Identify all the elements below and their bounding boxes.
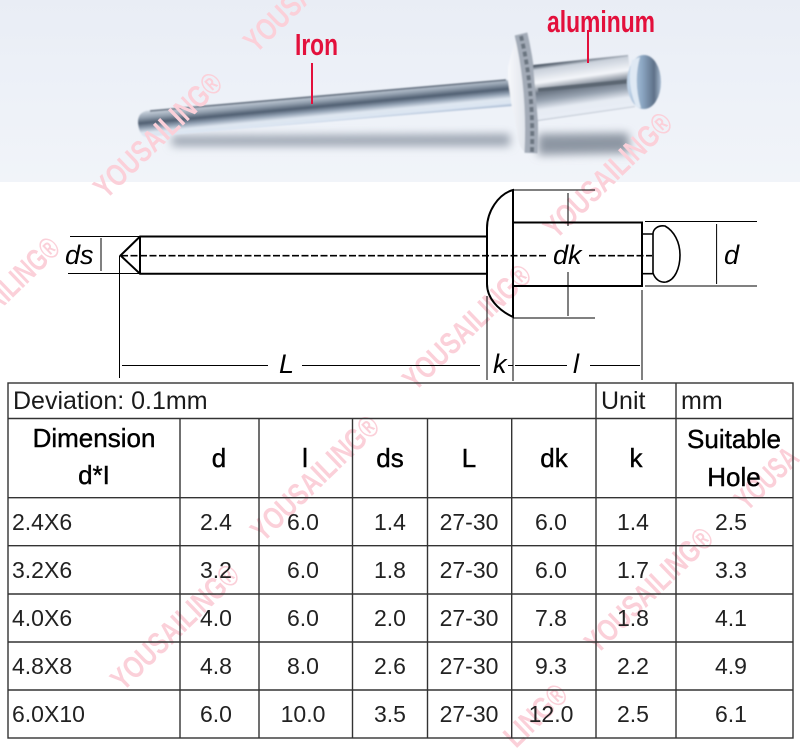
row 3.2X6: 3.2X6 — [12, 557, 72, 583]
row 6.0X10: 2.5 — [617, 701, 649, 727]
row 4.8X8 — [12, 653, 747, 679]
row 6.0X10: 27-30 — [440, 701, 498, 727]
row 4.0X6: 4.0X6 — [12, 605, 72, 631]
row 2.4X6: 1.4 — [617, 509, 649, 535]
dimension lines — [68, 190, 757, 381]
rivet flange head — [487, 190, 513, 317]
row 6.0X10: 6.1 — [715, 701, 747, 727]
watermarks: YOUSAILING® — [578, 520, 721, 660]
row 3.2X6: 6.0 — [287, 557, 319, 583]
row 4.0X6: 4.0 — [200, 605, 232, 631]
row 4.0X6: 6.0 — [287, 605, 319, 631]
row 4.8X8: 4.9 — [715, 653, 747, 679]
row 4.0X6: 1.8 — [617, 605, 649, 631]
table header row: d — [212, 443, 226, 473]
table header row: k — [630, 443, 644, 473]
watermarks: YOUSAILING® — [87, 65, 230, 205]
table header row: l — [302, 443, 308, 473]
row 4.0X6: 4.1 — [715, 605, 747, 631]
table data rows — [12, 509, 747, 727]
row 4.8X8: 27-30 — [440, 653, 498, 679]
label: aluminum: aluminum — [547, 4, 655, 39]
table header row: dk — [540, 443, 569, 473]
row 4.0X6 — [12, 605, 747, 631]
watermarks: YOUSAILING® — [244, 408, 387, 548]
table header row: L — [462, 443, 476, 473]
row 3.2X6 — [12, 557, 747, 583]
label: Iron: Iron — [295, 27, 338, 62]
row 3.2X6: 1.8 — [374, 557, 406, 583]
row 2.4X6: 2.4X6 — [12, 509, 72, 535]
panel: product photo — [0, 0, 800, 182]
diagram dimension labels: dk — [553, 240, 583, 270]
rivet body — [513, 222, 642, 286]
row 2.4X6: 6.0 — [535, 509, 567, 535]
label: Iron — [295, 27, 338, 104]
row 4.0X6: 7.8 — [535, 605, 567, 631]
row 3.2X6: 3.3 — [715, 557, 747, 583]
table header row: ds — [376, 443, 404, 473]
watermarks: YOUSAILING® — [537, 105, 680, 245]
row 2.4X6 — [12, 509, 747, 535]
icon: rivet photograph — [138, 34, 661, 153]
row 4.8X8: 4.8 — [200, 653, 232, 679]
watermarks: YOUSAILING® — [396, 257, 539, 397]
row 2.4X6: 27-30 — [440, 509, 498, 535]
table grid — [8, 383, 793, 738]
diagram dimension labels: l — [573, 349, 580, 379]
table header row: Suitable — [687, 424, 781, 454]
centre line — [121, 255, 652, 257]
row 6.0X10: 6.0X10 — [12, 701, 85, 727]
row 6.0X10: 10.0 — [281, 701, 325, 727]
rivet shadow — [172, 133, 630, 155]
technical diagram — [68, 190, 757, 381]
row 6.0X10: 6.0 — [200, 701, 232, 727]
watermarks: YOUSAILING® — [104, 557, 247, 697]
shaft outline — [120, 236, 487, 274]
row 3.2X6: 1.7 — [617, 557, 649, 583]
row 4.8X8: 4.8X8 — [12, 653, 72, 679]
diagram dimension labels: k — [493, 349, 508, 379]
row 4.0X6: 2.0 — [374, 605, 406, 631]
diagram dimension labels: d — [724, 240, 740, 270]
table header row: Dimension — [33, 423, 155, 453]
row 3.2X6: 27-30 — [440, 557, 498, 583]
mandrel head — [642, 226, 680, 282]
table header row: d*I — [78, 460, 110, 490]
table header row: Hole — [707, 462, 761, 492]
table top row: mm — [681, 387, 723, 415]
row 4.8X8: 9.3 — [535, 653, 567, 679]
table header row — [33, 423, 781, 492]
specification table — [8, 383, 793, 738]
label: aluminum — [547, 4, 655, 63]
table top row — [13, 387, 723, 415]
diagram dimension labels — [65, 240, 740, 379]
row 3.2X6: 3.2 — [200, 557, 232, 583]
diagram dimension labels: ds — [65, 240, 94, 270]
row 2.4X6: 2.4 — [200, 509, 232, 535]
row 3.2X6: 6.0 — [535, 557, 567, 583]
row 6.0X10: 3.5 — [374, 701, 406, 727]
table top row: Deviation: 0.1mm — [13, 387, 208, 415]
row 4.8X8: 2.6 — [374, 653, 406, 679]
row 6.0X10 — [12, 701, 747, 727]
row 2.4X6: 6.0 — [287, 509, 319, 535]
row 4.0X6: 27-30 — [440, 605, 498, 631]
diagram dimension labels: L — [279, 349, 294, 379]
row 4.8X8: 8.0 — [287, 653, 319, 679]
table top row: Unit — [601, 387, 646, 415]
row 6.0X10: 12.0 — [529, 701, 573, 727]
row 4.8X8: 2.2 — [617, 653, 649, 679]
row 2.4X6: 2.5 — [715, 509, 747, 535]
row 2.4X6: 1.4 — [374, 509, 406, 535]
